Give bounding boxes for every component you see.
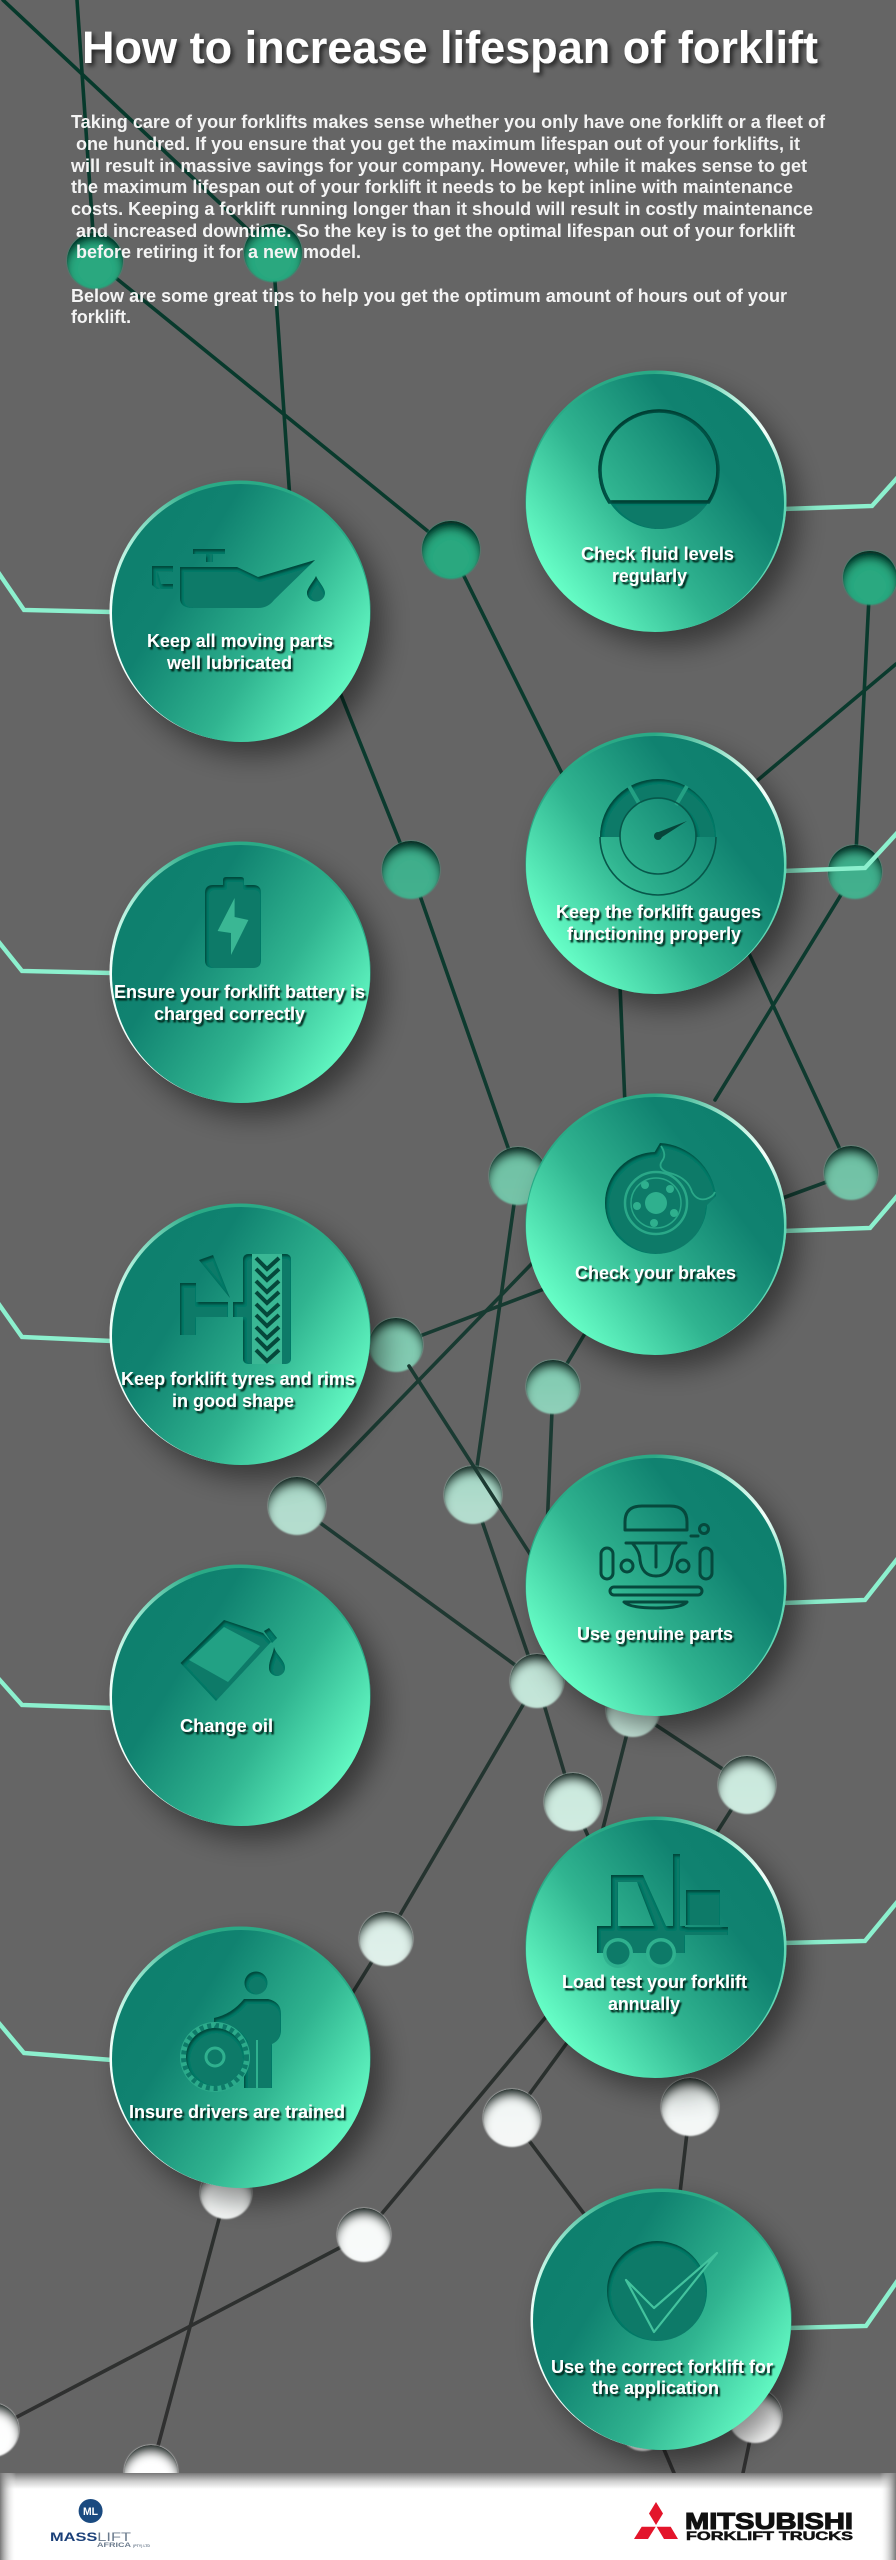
label: use the correct forklift: the application — [592, 2377, 719, 2398]
icon: fluid level gauge — [600, 411, 718, 529]
intro text block: forklift. — [71, 307, 131, 327]
label: ensure battery charged: charged correctly — [154, 1003, 306, 1024]
icon: brake disc — [605, 1143, 716, 1254]
panel: battery charged correctly — [110, 842, 370, 1103]
label: ensure battery charged: Ensure your forklift battery is — [114, 981, 365, 1002]
icon: car parts — [601, 1506, 712, 1608]
label: keep tyres and rims: in good shape — [172, 1390, 294, 1411]
panel: keep gauges functioning — [526, 732, 786, 994]
logo: Masslift Africa: MASS LIFT — [50, 2530, 132, 2544]
label: check fluid levels — [581, 543, 734, 586]
label: keep tyres and rims — [121, 1368, 355, 1411]
label: change oil: Change oil — [180, 1715, 273, 1736]
icon: oil can — [152, 549, 325, 608]
label: load test: annually — [608, 1993, 681, 2014]
intro text block — [70, 112, 826, 327]
icon: tyre and axle — [180, 1254, 291, 1364]
intro text block: Taking care of your forklifts makes sense whether you only have one forklift or a fleet of — [71, 112, 826, 132]
panel: insure drivers trained — [110, 1926, 370, 2188]
label: keep all moving parts: well lubricated — [166, 652, 292, 673]
panel: check your brakes — [526, 1094, 786, 1355]
network line crossing over node — [409, 1366, 550, 1585]
label: keep the forklift gauges: Keep the forklift gauges — [556, 901, 761, 922]
panel: load test annually — [526, 1816, 786, 2078]
panel: check fluid levels — [526, 370, 786, 632]
icon: check mark — [607, 2241, 717, 2341]
intro text block: one hundred. If you ensure that you get the maximum lifespan out of your forklifts, it — [76, 134, 800, 154]
panel: correct forklift for application — [530, 2188, 792, 2450]
intro text block: Below are some great tips to help you get the optimum amount of hours out of your — [71, 286, 787, 306]
mint connector lines — [0, 477, 896, 2328]
title: How to increase lifespan of forklift — [82, 22, 818, 73]
logo: Masslift Africa — [50, 2499, 150, 2549]
logo: Mitsubishi Forklift Trucks: FORKLIFT TRUCKS — [686, 2531, 853, 2543]
icon: dashboard gauge — [600, 779, 716, 895]
logo: Masslift Africa: (PTY) LTD — [133, 2543, 150, 2548]
label: keep the forklift gauges: functioning properly — [567, 923, 742, 944]
label: keep all moving parts: Keep all moving parts — [147, 630, 333, 651]
label: load test — [562, 1971, 747, 2014]
intro text block: and increased downtime. So the key is to get the optimal lifespan out of your forklift — [76, 221, 795, 241]
intro text block: costs. Keeping a forklift running longer than it should will result in costly maintenance — [71, 199, 813, 219]
panel: use genuine parts — [526, 1454, 786, 1716]
label: ensure battery charged — [114, 981, 365, 1024]
intro text block: before retiring it for a new model. — [76, 242, 361, 262]
label: insure drivers are trained: Insure drivers are trained — [129, 2101, 345, 2122]
panel: keep moving parts lubricated — [110, 480, 370, 742]
panel: change oil — [110, 1564, 370, 1826]
label: keep all moving parts — [147, 630, 333, 673]
panel: tyres and rims — [110, 1204, 370, 1465]
label: use the correct forklift: Use the correct forklift for — [551, 2356, 773, 2377]
icon: driver with wheel — [180, 1972, 281, 2092]
icon: oil container — [180, 1620, 285, 1701]
intro text block: the maximum lifespan out of your forklift it needs to be kept inline with maintenance — [71, 177, 793, 197]
intro text block: will result in massive savings for your company. However, while it makes sense to get — [70, 156, 807, 176]
label: check fluid levels: regularly — [612, 565, 688, 586]
logo: Masslift Africa: AFRICA — [97, 2543, 132, 2549]
icon: battery — [205, 877, 261, 968]
label: load test: Load test your forklift — [562, 1971, 747, 1992]
label: keep the forklift gauges — [556, 901, 761, 944]
label: use the correct forklift — [551, 2356, 773, 2398]
label: check your brakes: Check your brakes — [575, 1262, 736, 1283]
logo: Masslift Africa: ML — [83, 2506, 98, 2518]
label: check fluid levels: Check fluid levels — [581, 543, 734, 564]
label: keep tyres and rims: Keep forklift tyres and rims — [121, 1368, 355, 1389]
footer band — [0, 2473, 896, 2560]
logo: Mitsubishi Forklift Trucks: MITSUBISHI — [685, 2508, 853, 2534]
label: use genuine parts: Use genuine parts — [577, 1623, 733, 1644]
logo: Mitsubishi Forklift Trucks — [634, 2502, 853, 2543]
icon: forklift truck — [597, 1854, 728, 1968]
